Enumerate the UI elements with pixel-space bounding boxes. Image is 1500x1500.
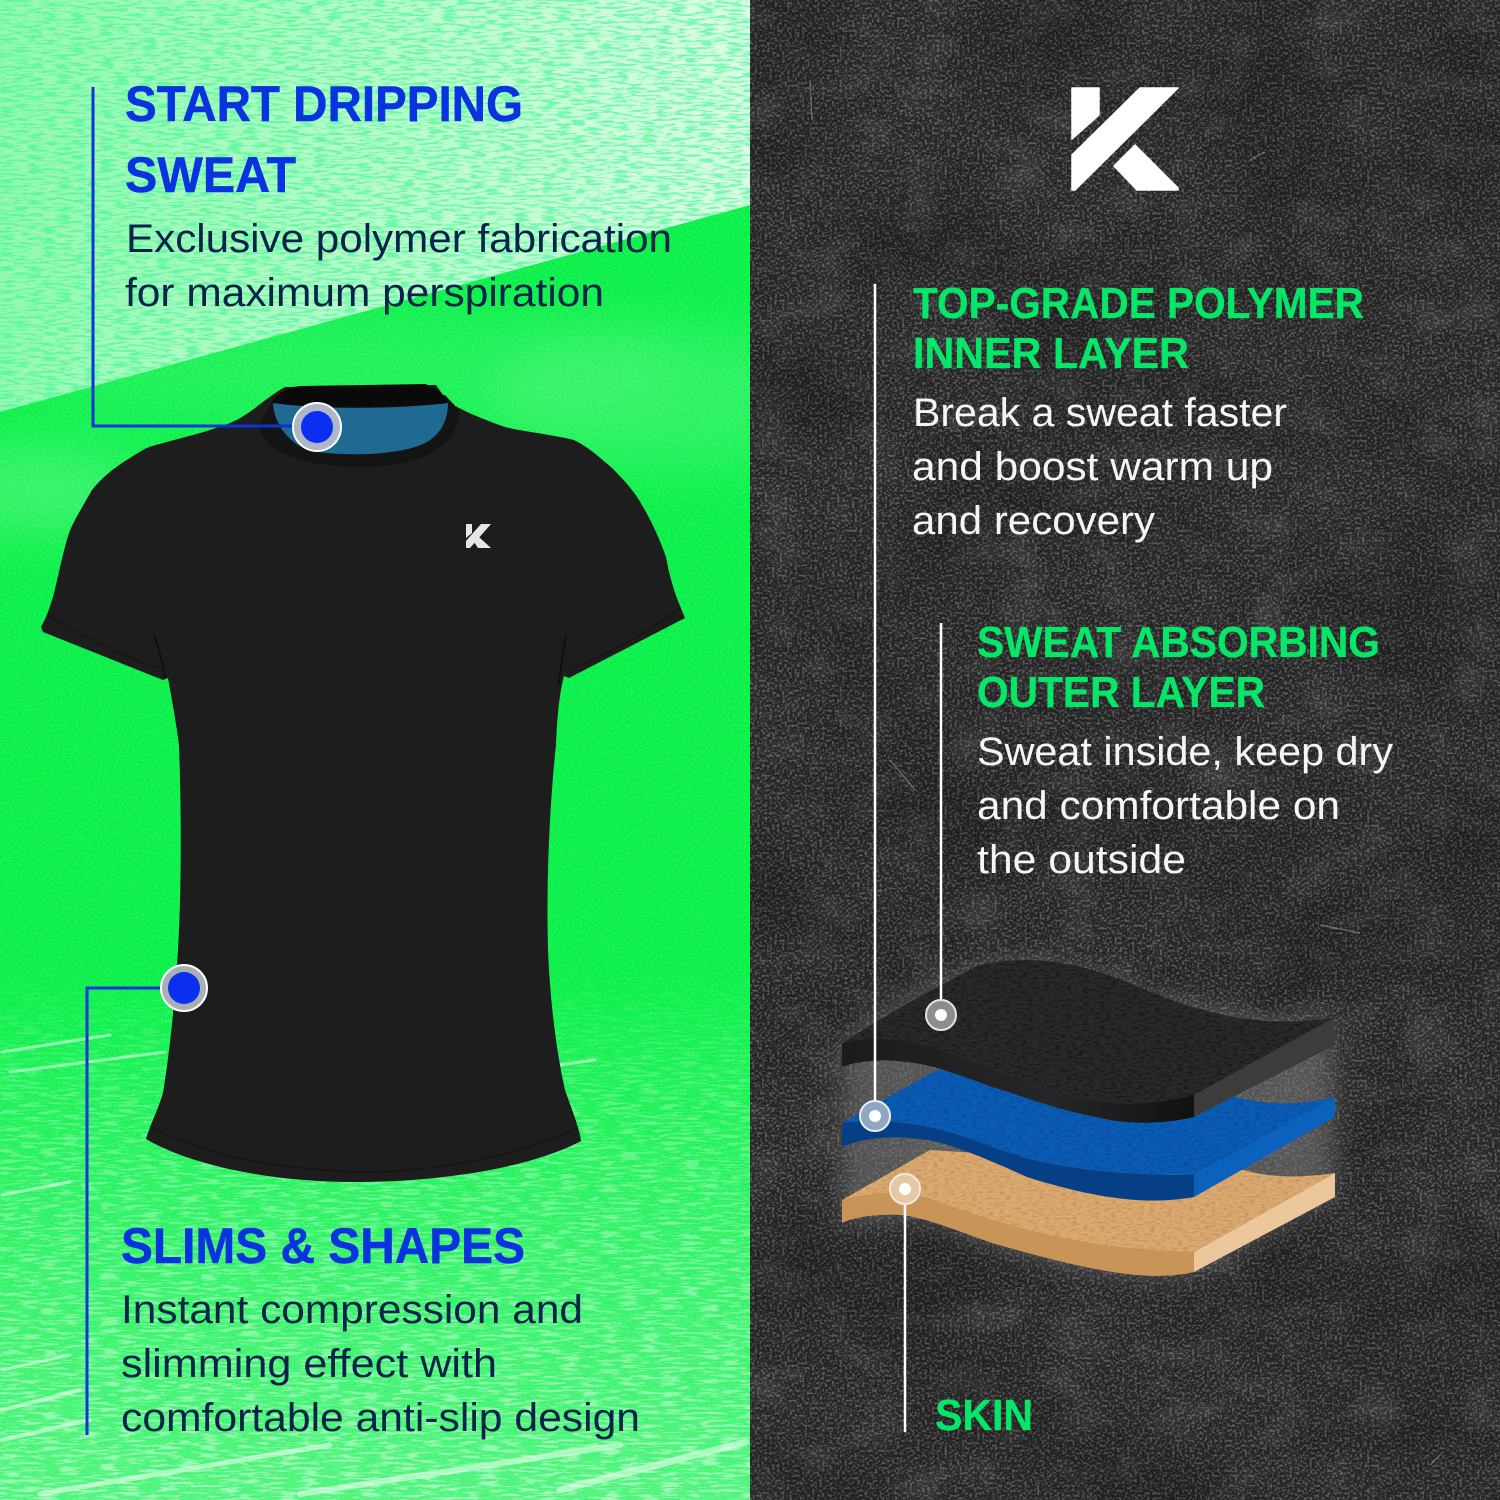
chest logo	[466, 524, 491, 548]
callout: waist connector	[87, 965, 207, 1435]
fabric layers diagram	[840, 955, 1340, 1276]
collar band	[259, 395, 459, 467]
text: compression: comfortable anti-slip design	[121, 1396, 640, 1440]
shirt body	[41, 385, 685, 1182]
callout: inner layer line	[860, 284, 890, 1131]
heading: top-grade polymer inner layer: TOP-GRADE POLYMER	[913, 279, 1364, 328]
heading: top-grade polymer inner layer: INNER LAYER	[913, 329, 1189, 378]
glow behind layers	[842, 960, 1335, 1275]
text: break a sweat: and boost warm up	[912, 445, 1273, 489]
heading: sweat absorbing outer layer	[977, 618, 1380, 717]
text: sweat inside	[977, 730, 1393, 882]
skin layer	[840, 1145, 1340, 1276]
t-shirt	[41, 384, 685, 1182]
heading: start dripping sweat	[125, 76, 523, 203]
heading: slims and shapes: SLIMS & SHAPES	[121, 1218, 525, 1274]
text: polymer fabrication: Exclusive polymer fabrication	[126, 217, 672, 261]
heading: sweat absorbing outer layer: SWEAT ABSORBING	[977, 618, 1380, 667]
callout: neck connector	[93, 87, 341, 451]
text: break a sweat	[912, 391, 1287, 543]
text: sweat inside: Sweat inside, keep dry	[977, 730, 1393, 774]
text: polymer fabrication	[125, 217, 672, 315]
text: compression: Instant compression and	[121, 1288, 583, 1332]
text: sweat inside: and comfortable on	[977, 784, 1340, 828]
heading: top-grade polymer inner layer	[913, 279, 1364, 378]
callout: skin line	[890, 1174, 920, 1432]
panel: green left background	[0, 0, 830, 1500]
heading: start dripping sweat: START DRIPPING	[125, 76, 523, 132]
text: compression	[121, 1288, 640, 1440]
panel: dark right background	[750, 0, 1500, 1500]
inner blue lining	[273, 403, 448, 454]
collar back	[272, 384, 448, 407]
sleeve seams	[47, 608, 680, 1172]
text: break a sweat: and recovery	[912, 499, 1155, 543]
logo: K mark	[1072, 88, 1178, 190]
text: break a sweat: Break a sweat faster	[913, 391, 1287, 435]
text: compression: slimming effect with	[121, 1342, 497, 1386]
heading: sweat absorbing outer layer: OUTER LAYER	[977, 668, 1265, 717]
text: polymer fabrication: for maximum perspiration	[125, 271, 604, 315]
heading: start dripping sweat: SWEAT	[125, 147, 296, 203]
scratches	[810, 80, 1440, 1465]
heading: skin: SKIN	[935, 1391, 1033, 1440]
callout: outer layer line	[926, 623, 956, 1030]
text: sweat inside: the outside	[977, 838, 1186, 882]
black layer	[840, 955, 1340, 1123]
blue layer	[840, 1065, 1340, 1201]
white brush streaks	[2, 1035, 746, 1494]
